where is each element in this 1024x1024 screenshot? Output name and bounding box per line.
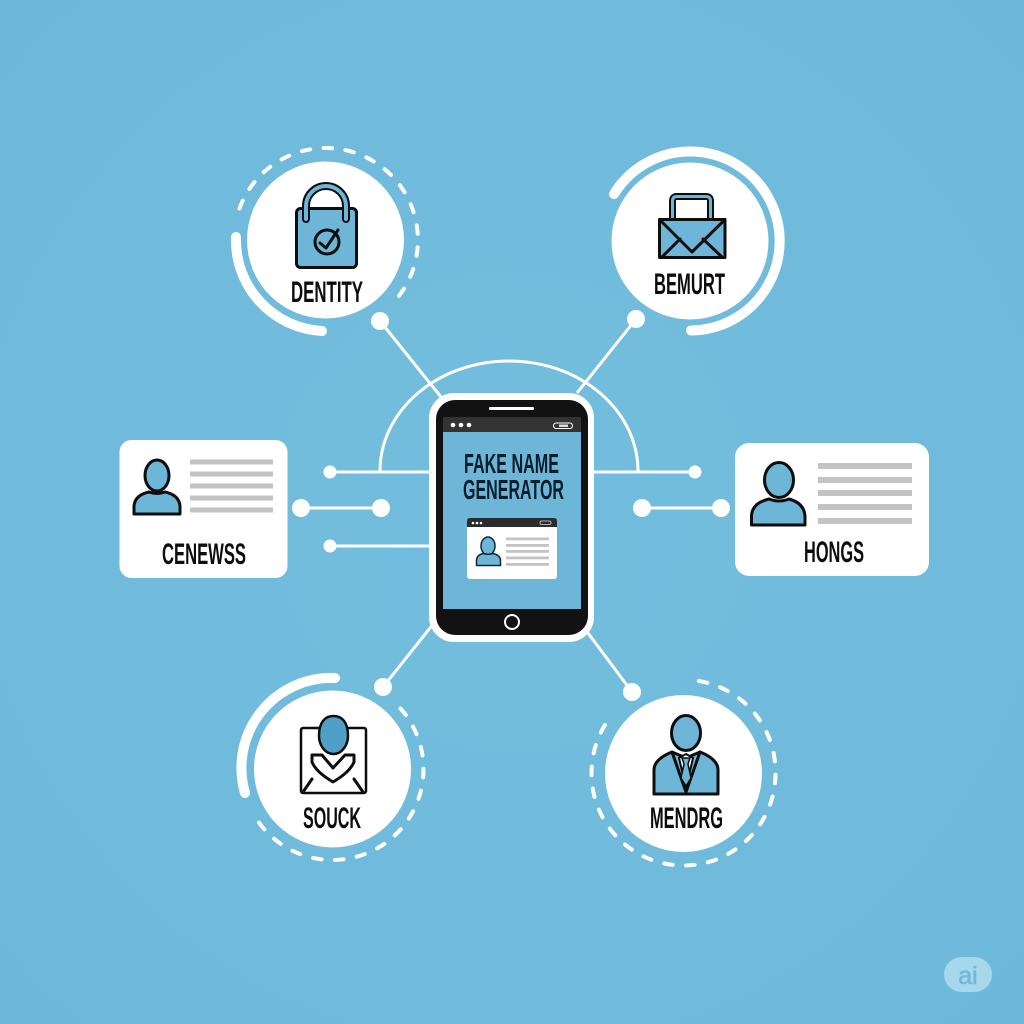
icon: padlock with check	[296, 186, 356, 268]
panel: central phone	[429, 393, 594, 642]
title: FAKE NAME GENERATOR: GENERATOR	[463, 474, 564, 505]
phone home button	[505, 615, 519, 629]
connector: right middle	[633, 499, 730, 517]
icon: portrait in frame	[301, 716, 366, 793]
text lines	[190, 460, 273, 512]
icon: person	[134, 460, 180, 514]
connector: arc behind phone	[380, 361, 638, 471]
panel: souck circle	[241, 678, 424, 860]
connector: right upper	[592, 466, 702, 478]
panel: mendrg circle	[591, 681, 776, 866]
connector: left lower	[324, 540, 432, 552]
label: HONGS: HONGS	[804, 536, 864, 569]
icon: person	[752, 462, 805, 525]
text lines	[818, 463, 912, 524]
mini profile card	[467, 518, 557, 579]
connector: bottom left	[374, 623, 434, 696]
title: FAKE NAME GENERATOR: FAKE NAME	[464, 448, 559, 479]
connector: left upper	[324, 466, 432, 478]
icon: business person	[654, 716, 718, 794]
label: SOUCK: SOUCK	[303, 802, 361, 835]
phone status bar	[443, 417, 581, 432]
title: FAKE NAME GENERATOR	[463, 448, 564, 505]
phone screen	[443, 417, 581, 609]
panel: cenewss id card	[120, 440, 288, 578]
panel: bemurt circle	[612, 152, 780, 330]
label: MENDRG: MENDRG	[650, 802, 723, 835]
badge: ai watermark	[944, 957, 992, 992]
label: BEMURT: BEMURT	[654, 268, 725, 301]
connector: bottom right	[588, 633, 641, 701]
badge: ai watermark: ai	[958, 962, 978, 990]
panel: hongs id card	[735, 443, 929, 576]
connector: left middle	[292, 499, 390, 517]
connector: top right	[577, 310, 645, 393]
panel: identity circle	[236, 148, 418, 331]
icon: envelope with lock	[660, 196, 725, 258]
connector: top left	[371, 312, 441, 397]
phone speaker	[489, 407, 534, 410]
label: DENTITY: DENTITY	[291, 276, 363, 309]
label: CENEWSS: CENEWSS	[162, 538, 246, 571]
